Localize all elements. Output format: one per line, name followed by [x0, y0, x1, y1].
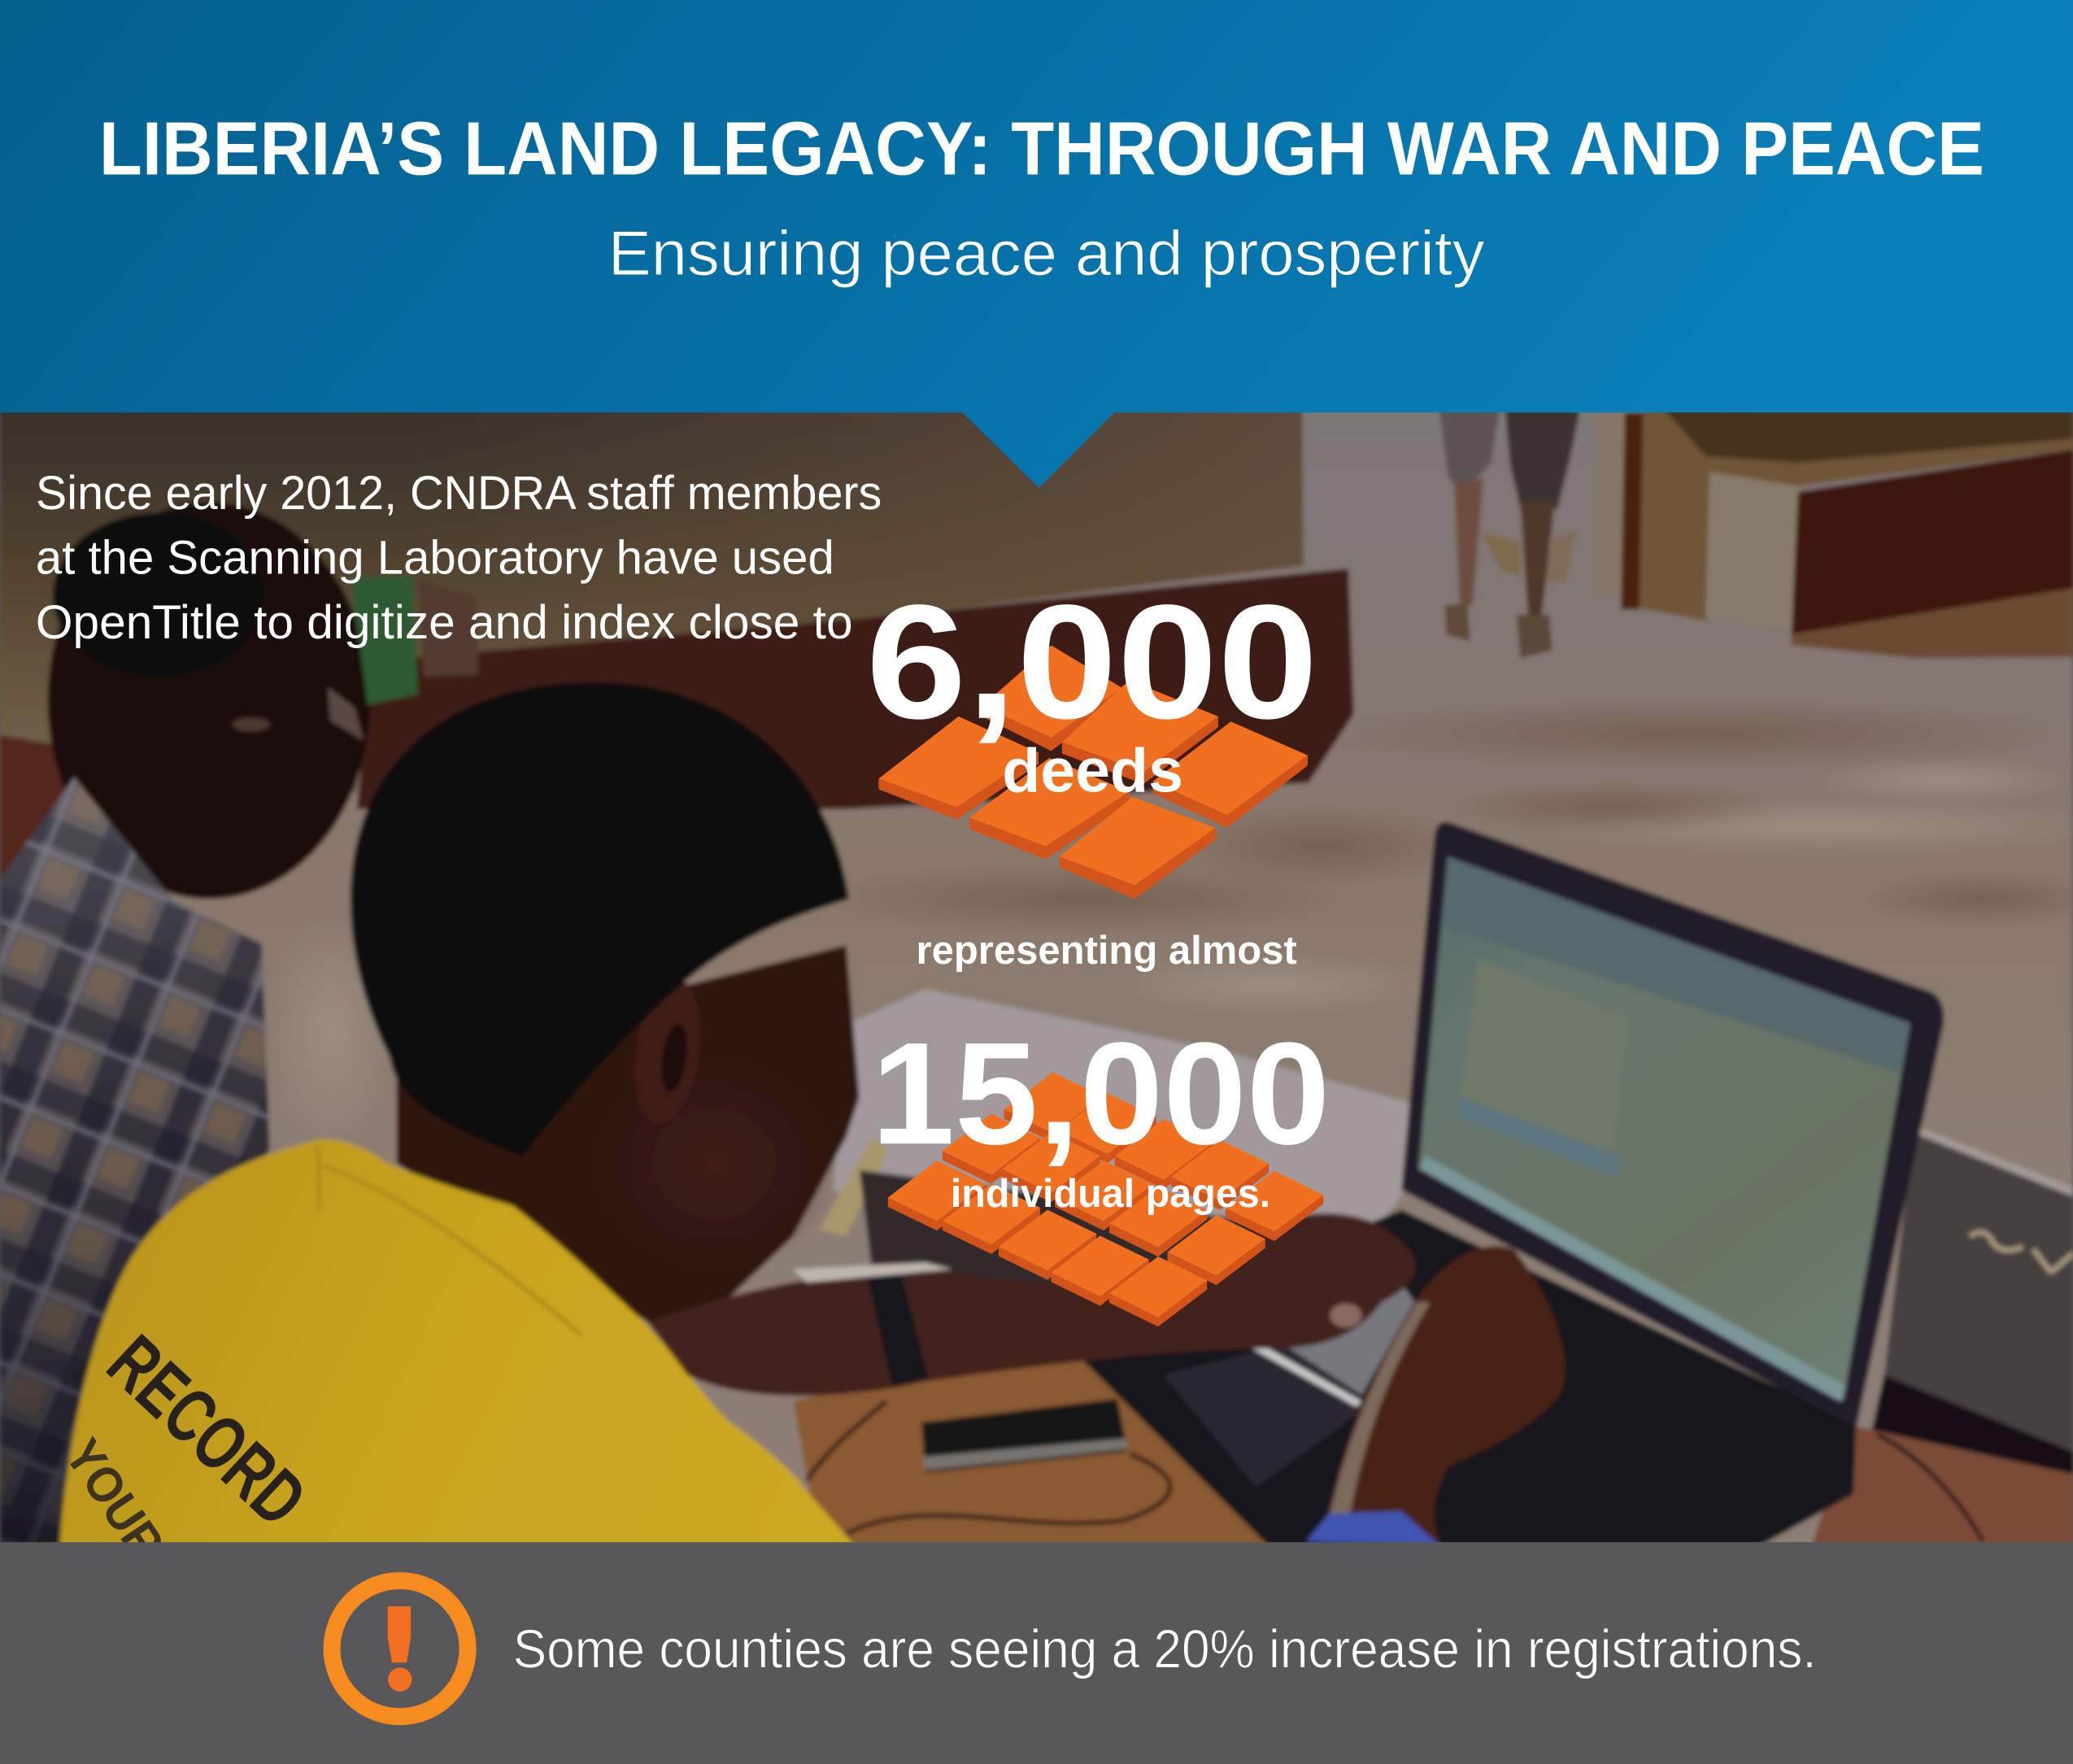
- intro text: Since early 2012, CNDRA staff members: [36, 467, 882, 520]
- shirt lettering: RECORD: [92, 1319, 322, 1542]
- intro text: OpenTitle to digitize and index close to: [36, 596, 853, 649]
- laptop lid: [1401, 822, 1944, 1428]
- intro text: [36, 467, 882, 649]
- yellow shirt: [59, 1139, 856, 1549]
- arm and hands: [648, 1213, 1416, 1396]
- green bottle: [351, 577, 418, 704]
- man one plaid shirt: [0, 777, 270, 1547]
- laptop screen: [1418, 856, 1910, 1401]
- phone: [921, 1399, 1128, 1473]
- intro text: at the Scanning Laboratory have used: [36, 532, 834, 585]
- label: deeds: deeds: [1002, 737, 1183, 806]
- subtitle: Ensuring peace and prosperity: [608, 217, 1485, 289]
- stat: 15,000: 15,000: [871, 1012, 1330, 1174]
- icon: fifteen orange page tiles: [888, 1073, 1323, 1326]
- callout text: Some counties are seeing a 20% increase in registrations.: [513, 1620, 1817, 1680]
- connector text: representing almost: [917, 929, 1297, 973]
- man one head: [48, 503, 370, 899]
- cables: [807, 1401, 1983, 1541]
- paper and desk background: [833, 989, 1414, 1256]
- table: [1811, 1425, 2073, 1547]
- stat: 6,000: 6,000: [866, 572, 1318, 753]
- back wall left: [0, 397, 1304, 793]
- vaio sleeve: [1884, 1126, 2073, 1454]
- right background structures: [1595, 412, 1625, 595]
- walking legs: [1439, 403, 1500, 496]
- floor: [0, 397, 2073, 1560]
- icon: exclamation in circle: [332, 1581, 468, 1717]
- bottom callout band: [0, 1542, 2073, 1764]
- shirt lettering: YOUR: [54, 1429, 175, 1570]
- scanner: [860, 1170, 1375, 1302]
- dark red ledge: [357, 568, 1354, 809]
- laptop base: [1071, 1209, 1856, 1547]
- title: LIBERIA’S LAND LEGACY: THROUGH WAR AND PEACE: [99, 107, 1984, 191]
- shirt lettering: [54, 1319, 322, 1570]
- man two face and neck: [397, 945, 860, 1322]
- label: individual pages: individual pages.: [951, 1172, 1270, 1216]
- header banner: [0, 0, 2073, 488]
- photo: staff members at laptop: [0, 397, 2073, 1560]
- icon: six orange deed tiles: [878, 645, 1308, 899]
- man two hair: [351, 682, 849, 1156]
